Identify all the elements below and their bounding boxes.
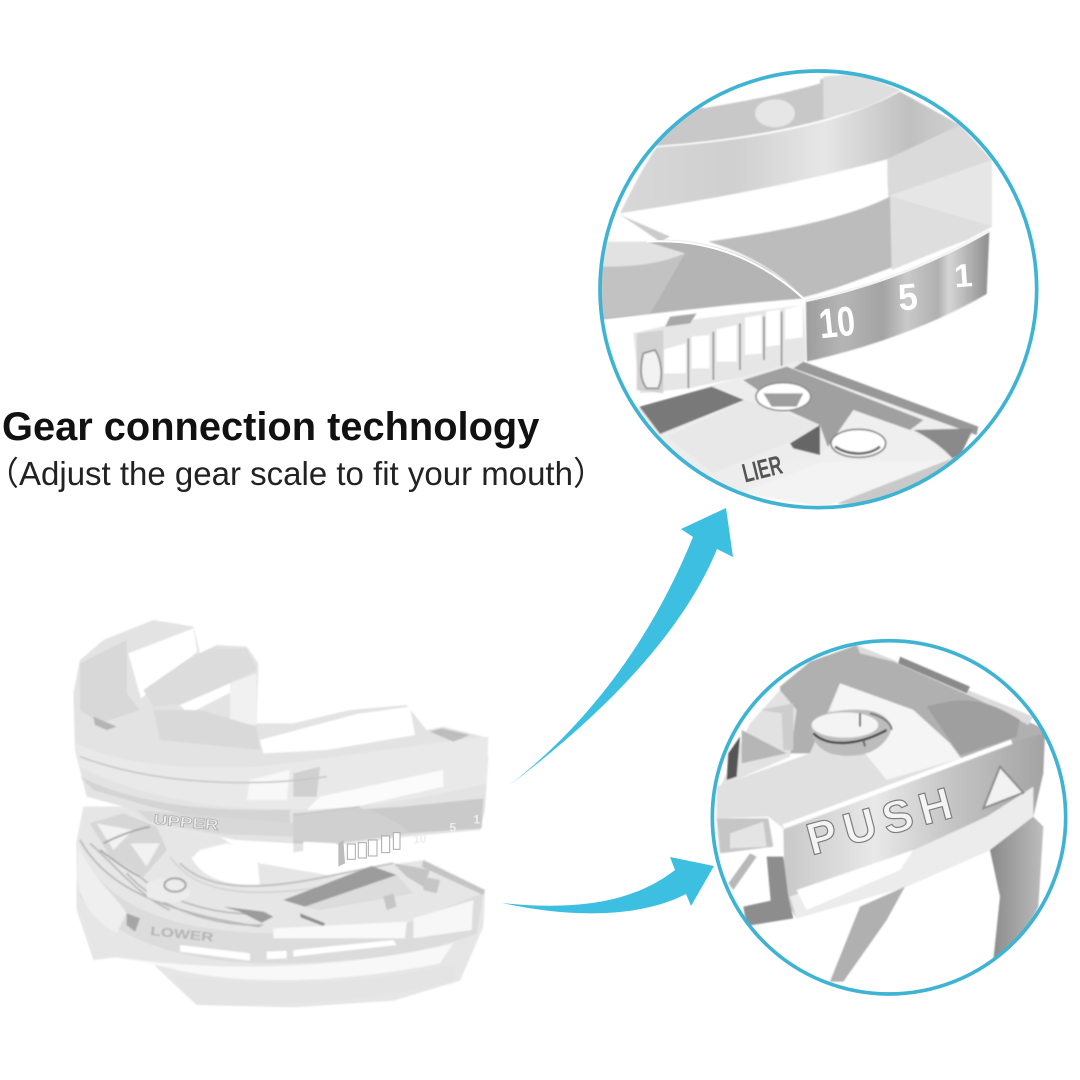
product: transparent mouthguard: 1 bbox=[473, 812, 480, 826]
mid gray surface bbox=[709, 196, 892, 298]
product: transparent mouthguard: UPPER bbox=[153, 812, 220, 834]
gear teeth bbox=[603, 303, 978, 507]
upper tray bbox=[73, 620, 488, 853]
right rail bbox=[780, 645, 1047, 763]
zoom detail: gear scale: LIER bbox=[739, 450, 785, 488]
straps bbox=[990, 817, 1043, 960]
PUSH band bbox=[783, 733, 1045, 918]
zoom detail: push tab: PUSH bbox=[801, 777, 958, 865]
subtitle: （Adjust the gear scale to fit your mouth） bbox=[0, 455, 606, 492]
white window bbox=[886, 160, 888, 166]
plate with screw bbox=[716, 698, 962, 828]
zoom detail: push tab bbox=[712, 641, 1066, 994]
zoom detail: gear scale: 1 bbox=[953, 256, 974, 294]
zoom detail: gear scale bbox=[600, 71, 1037, 508]
product: transparent mouthguard: 5 bbox=[449, 821, 456, 835]
arrow: to push detail bbox=[502, 857, 714, 913]
left dome bbox=[600, 241, 803, 320]
zoom detail: gear scale: 10 bbox=[817, 297, 857, 347]
product: transparent mouthguard: 10 bbox=[413, 831, 427, 846]
lower tray: LOWER bbox=[150, 924, 214, 945]
upper dark lens bbox=[656, 78, 832, 146]
product: transparent mouthguard bbox=[73, 620, 488, 1007]
centre opening bbox=[192, 843, 260, 885]
ring bbox=[600, 71, 1037, 508]
left gears block bbox=[720, 690, 797, 787]
scale strip bbox=[806, 232, 989, 362]
lower plate bbox=[633, 362, 978, 503]
small gear teeth bbox=[347, 833, 400, 859]
zoom detail: gear scale: 5 bbox=[896, 275, 919, 319]
lower tray bbox=[77, 807, 485, 1007]
arrow: to gear detail bbox=[507, 508, 733, 787]
ring bbox=[712, 641, 1066, 994]
title: Gear connection technology bbox=[2, 405, 539, 449]
